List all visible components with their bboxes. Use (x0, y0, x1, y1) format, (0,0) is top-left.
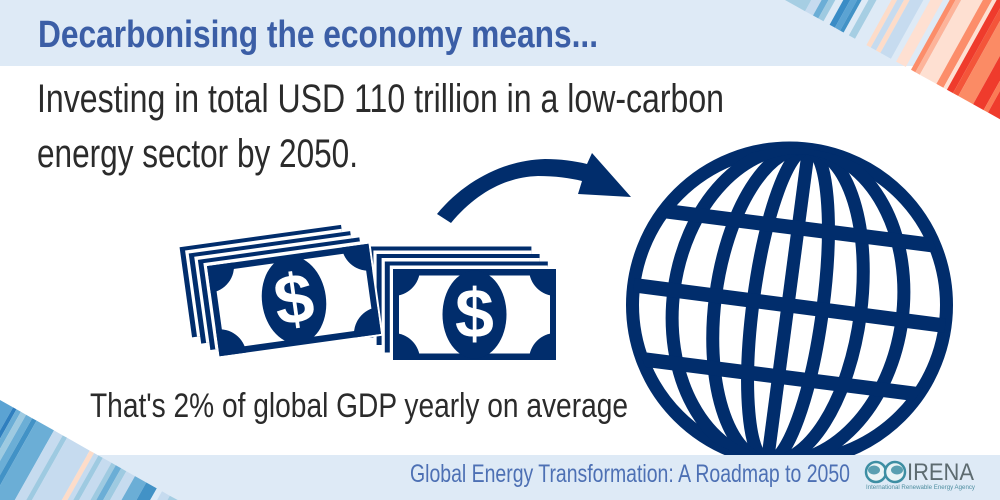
main statement: Investing in total USD 110 trillion in a low-carbon (37, 77, 724, 121)
IRENA logo: IRENA (907, 459, 974, 486)
main statement (37, 77, 724, 176)
footer report title: Global Energy Transformation: A Roadmap to 2050 (410, 460, 850, 488)
caption: share of GDP: That's 2% of global GDP yearly on average (90, 387, 628, 425)
footer band (0, 455, 1000, 500)
IRENA logo: International Renewable Energy Agency (866, 484, 976, 491)
title: Decarbonising the economy means... (38, 14, 598, 56)
climate stripes: top right (785, 0, 1000, 119)
main statement: energy sector by 2050. (37, 132, 358, 176)
header band (0, 0, 1000, 66)
icon: right banknotes: $ (455, 274, 494, 352)
icon: left banknotes: $ (269, 258, 319, 340)
icon: curved arrow (437, 153, 631, 223)
climate stripes: bottom left (0, 400, 178, 500)
IRENA logo (866, 459, 976, 491)
icon: right banknotes (370, 246, 556, 360)
icon: globe (625, 133, 955, 477)
icon: left banknotes (180, 224, 382, 356)
